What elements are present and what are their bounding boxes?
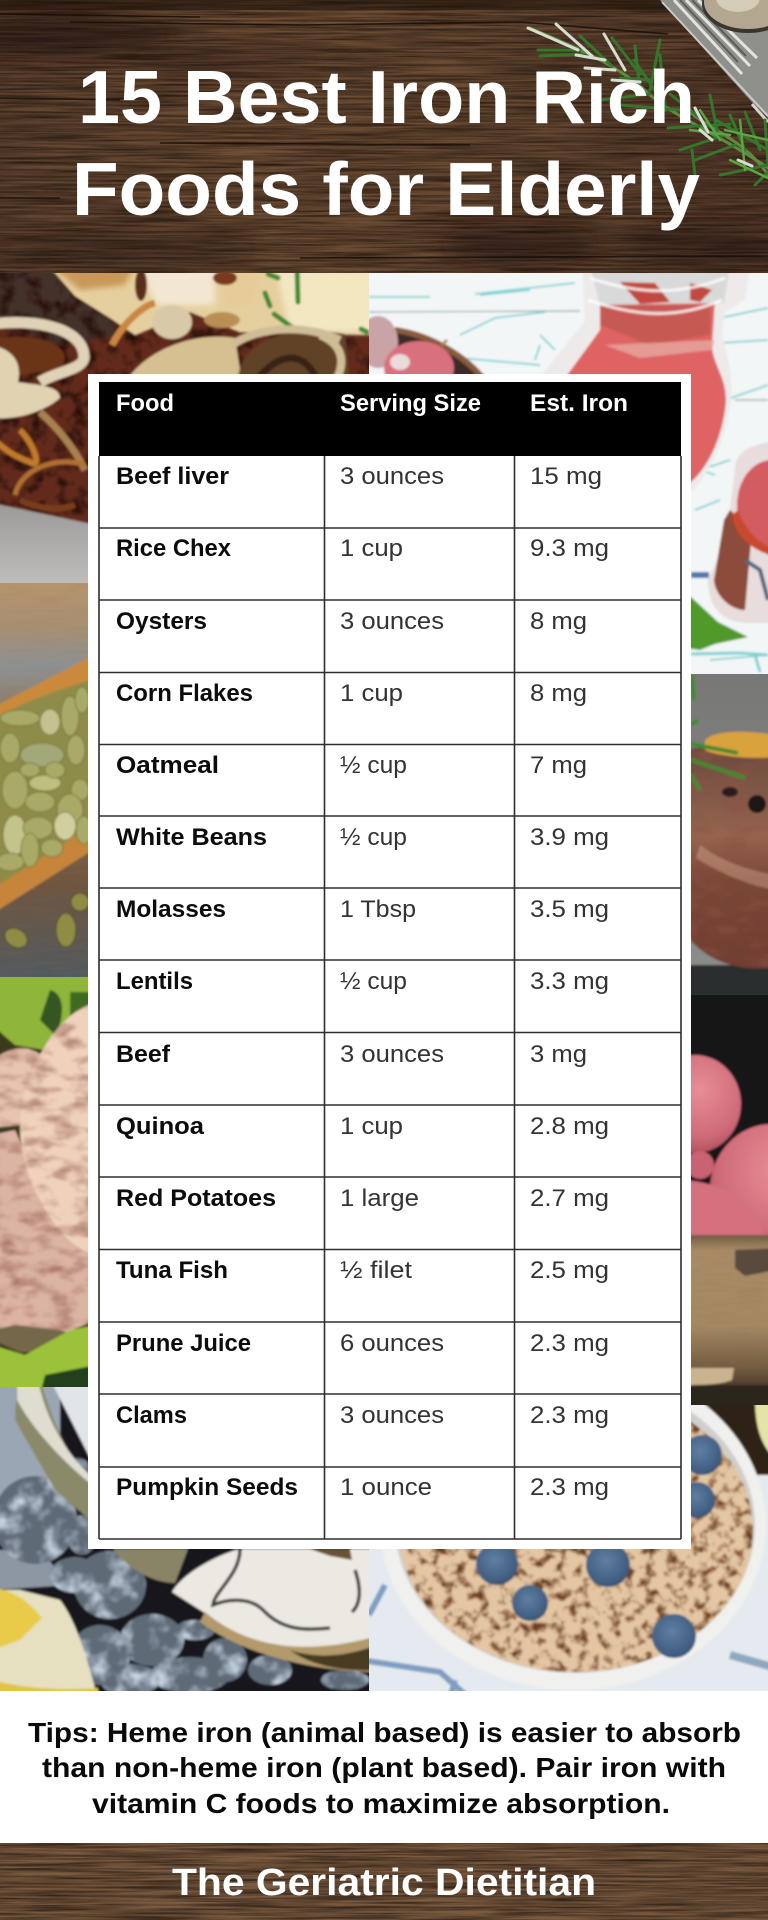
row: Lentils bbox=[116, 968, 609, 995]
row: Oatmeal: ½ cup bbox=[340, 752, 407, 779]
row: Beef: 3 ounces bbox=[340, 1041, 444, 1068]
row: Oysters bbox=[116, 608, 587, 635]
table header bbox=[99, 382, 681, 456]
row: Tuna Fish: ½ filet bbox=[340, 1257, 412, 1284]
row: Oatmeal: 7 mg bbox=[530, 752, 587, 779]
row: Prune Juice: 6 ounces bbox=[340, 1330, 444, 1357]
row: Oysters: 8 mg bbox=[530, 608, 587, 635]
row: Oysters: 3 ounces bbox=[340, 608, 444, 635]
tips text block bbox=[0, 1691, 768, 1843]
row: Corn Flakes: 8 mg bbox=[530, 680, 587, 707]
row: Red Potatoes bbox=[116, 1185, 609, 1212]
row: Molasses bbox=[116, 896, 609, 923]
glass of juice bbox=[708, 441, 768, 623]
row: Quinoa: Quinoa bbox=[116, 1113, 205, 1140]
row: Prune Juice: 2.3 mg bbox=[530, 1330, 609, 1357]
lemon bbox=[0, 1590, 98, 1699]
row: Quinoa: 2.8 mg bbox=[530, 1113, 609, 1140]
row: Clams: 3 ounces bbox=[340, 1402, 444, 1429]
row: Red Potatoes: 2.7 mg bbox=[530, 1185, 609, 1212]
row: Clams: Clams bbox=[116, 1402, 187, 1429]
row: Beef liver: 3 ounces bbox=[340, 463, 444, 490]
row: Tuna Fish bbox=[116, 1257, 609, 1284]
row: Molasses: 3.5 mg bbox=[530, 896, 609, 923]
row: Pumpkin Seeds: Pumpkin Seeds bbox=[116, 1474, 298, 1501]
plate bbox=[0, 502, 88, 583]
row: Beef: 3 mg bbox=[530, 1041, 587, 1068]
table header: Est. Iron bbox=[530, 390, 628, 417]
row: White Beans: White Beans bbox=[116, 824, 267, 851]
photo: oat granola bowl with blueberries bbox=[369, 1405, 768, 1691]
row: Lentils: ½ cup bbox=[340, 968, 407, 995]
photo: oysters on ice bbox=[0, 1379, 377, 1699]
table header: Serving Size bbox=[340, 390, 481, 417]
table header: Food bbox=[116, 390, 174, 417]
onions bbox=[0, 303, 155, 508]
oyster bbox=[170, 1549, 369, 1648]
title bbox=[72, 55, 700, 231]
row: Pumpkin Seeds: 2.3 mg bbox=[530, 1474, 609, 1501]
row: Tuna Fish: 2.5 mg bbox=[530, 1257, 609, 1284]
row: Pumpkin Seeds: 1 ounce bbox=[340, 1474, 432, 1501]
row: Oysters: Oysters bbox=[116, 608, 207, 635]
tips text block: vitamin C foods to maximize absorption. bbox=[92, 1788, 670, 1819]
row: Rice Chex: Rice Chex bbox=[116, 535, 232, 562]
row: Molasses: Molasses bbox=[116, 896, 226, 923]
footer wood banner bbox=[0, 1843, 768, 1920]
row: Corn Flakes: 1 cup bbox=[340, 680, 403, 707]
row: White Beans bbox=[116, 824, 609, 851]
photo: prune juice jug and plums bbox=[358, 265, 768, 682]
row: Beef liver: 15 mg bbox=[530, 463, 602, 490]
header wood banner bbox=[0, 0, 768, 273]
photo: red potatoes in wooden bowl bbox=[691, 995, 768, 1405]
row: Clams: 2.3 mg bbox=[530, 1402, 609, 1429]
plums in bowl bbox=[396, 332, 478, 374]
row: Oatmeal bbox=[116, 752, 587, 779]
row: Red Potatoes: 1 large bbox=[340, 1185, 419, 1212]
row: Molasses: 1 Tbsp bbox=[340, 896, 416, 923]
row: Beef: Beef bbox=[116, 1041, 171, 1068]
row: White Beans: ½ cup bbox=[340, 824, 407, 851]
row: Quinoa: 1 cup bbox=[340, 1113, 403, 1140]
panel: food table card bbox=[88, 374, 691, 1549]
row: Prune Juice: Prune Juice bbox=[116, 1330, 251, 1357]
blueberries bbox=[476, 1435, 722, 1658]
row: Beef liver: Beef liver bbox=[116, 463, 229, 490]
leaf bbox=[685, 597, 748, 650]
icon: rosemary sprig bbox=[528, 24, 768, 185]
row: Beef liver bbox=[116, 463, 602, 490]
row: Rice Chex bbox=[116, 535, 609, 562]
chives bbox=[265, 265, 367, 332]
row: White Beans: 3.9 mg bbox=[530, 824, 609, 851]
row: Prune Juice bbox=[116, 1330, 609, 1357]
title: 15 Best Iron Rich bbox=[78, 55, 695, 139]
row: Corn Flakes: Corn Flakes bbox=[116, 680, 253, 707]
row: Pumpkin Seeds bbox=[116, 1474, 609, 1501]
row: Oatmeal: Oatmeal bbox=[116, 752, 219, 779]
photo: grilled steak bbox=[691, 674, 768, 995]
icon: fork and spoon bbox=[660, 0, 768, 122]
row: Corn Flakes bbox=[116, 680, 587, 707]
row: Red Potatoes: Red Potatoes bbox=[116, 1185, 276, 1212]
title: Foods for Elderly bbox=[72, 147, 700, 231]
tips text block: Tips: Heme iron (animal based) is easier to absorb bbox=[28, 1717, 741, 1748]
jug bbox=[540, 265, 750, 492]
tips text block: than non-heme iron (plant based). Pair iron with bbox=[42, 1752, 726, 1783]
table grid bbox=[99, 456, 681, 1539]
photo: pumpkin seeds in wooden scoop bbox=[0, 583, 88, 977]
photo: beef liver with onions and mashed potatoes bbox=[0, 265, 377, 591]
row: Quinoa bbox=[116, 1113, 609, 1140]
row: Lentils: Lentils bbox=[116, 968, 193, 995]
row: Clams bbox=[116, 1402, 609, 1429]
row: Rice Chex: 1 cup bbox=[340, 535, 403, 562]
row: Tuna Fish: Tuna Fish bbox=[116, 1257, 228, 1284]
row: Rice Chex: 9.3 mg bbox=[530, 535, 609, 562]
photo: tuna on lettuce bbox=[0, 977, 88, 1387]
ice chunks bbox=[0, 1458, 369, 1696]
footer brand name: The Geriatric Dietitian bbox=[172, 1862, 596, 1904]
upper shell bbox=[52, 1387, 88, 1459]
row: Lentils: 3.3 mg bbox=[530, 968, 609, 995]
row: Beef bbox=[116, 1041, 587, 1068]
